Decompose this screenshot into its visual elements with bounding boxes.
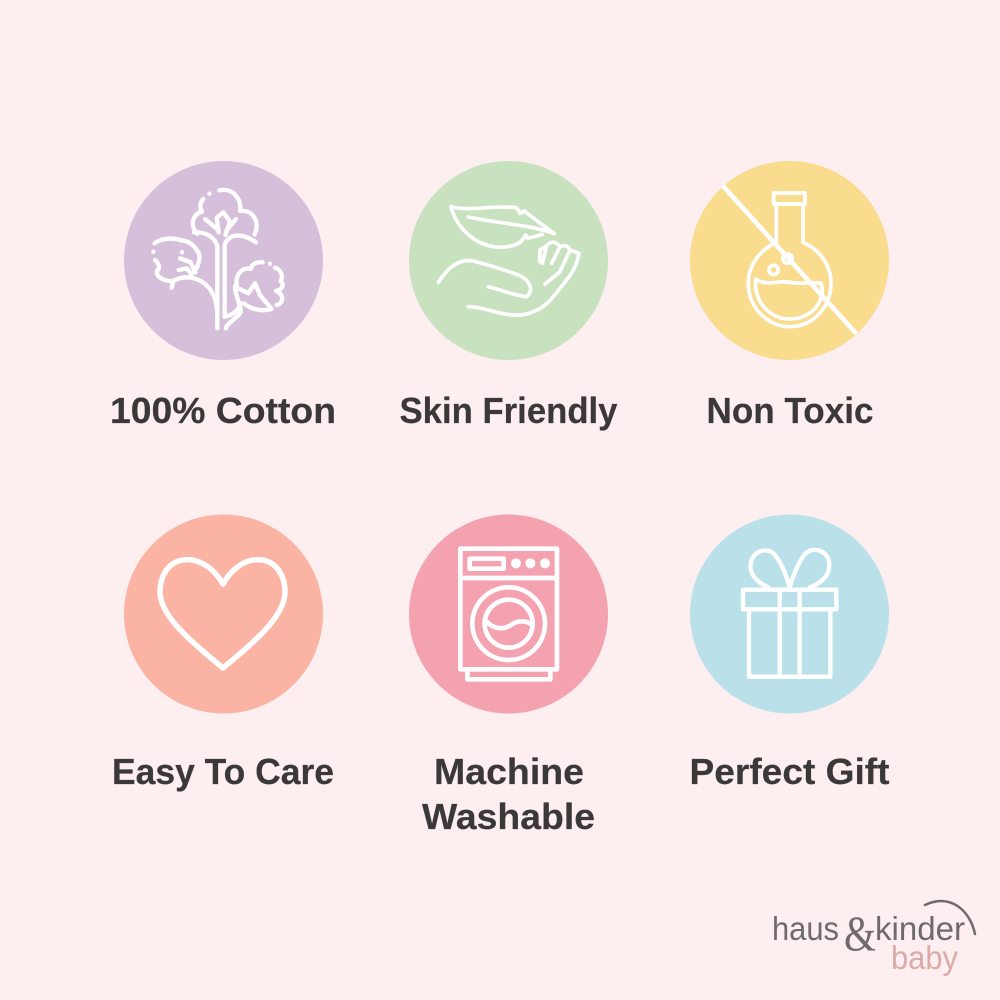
logo arc bbox=[925, 901, 975, 934]
logo wordmark: kinder: kinder bbox=[875, 910, 965, 947]
label: Machine Washable bbox=[422, 751, 595, 837]
circle: coral badge bbox=[124, 514, 323, 714]
label: Perfect Gift: Perfect Gift bbox=[690, 751, 890, 792]
label: Skin Friendly: Skin Friendly bbox=[400, 390, 618, 431]
icon: crossed-out flask bbox=[723, 186, 856, 334]
icon: leaf over hand bbox=[438, 207, 579, 315]
logo wordmark: baby: baby bbox=[891, 939, 958, 976]
panel: Perfect Gift bbox=[690, 514, 890, 792]
label: Non Toxic: Non Toxic bbox=[706, 390, 874, 431]
panel: 100% Cotton bbox=[110, 161, 336, 431]
panel: Skin Friendly bbox=[400, 161, 618, 431]
logo ampersand: & bbox=[844, 905, 876, 961]
icon: washing machine bbox=[460, 549, 557, 679]
circle: green badge bbox=[409, 161, 608, 360]
label: Machine Washable: Washable bbox=[422, 796, 595, 837]
logo wordmark: haus: haus bbox=[772, 910, 839, 947]
circle: purple badge bbox=[124, 161, 323, 360]
icon: cotton plant bbox=[153, 190, 283, 328]
icon: heart bbox=[160, 560, 285, 668]
panel: Machine Washable bbox=[409, 514, 608, 837]
circle: pink badge bbox=[409, 514, 608, 714]
circle: yellow badge bbox=[690, 161, 889, 360]
panel: Non Toxic bbox=[690, 161, 889, 431]
icon: gift box bbox=[743, 550, 836, 677]
label: 100% Cotton: 100% Cotton bbox=[110, 390, 336, 431]
circle: blue badge bbox=[690, 514, 889, 714]
panel: Easy To Care bbox=[112, 514, 334, 792]
label: Easy To Care: Easy To Care bbox=[112, 751, 334, 792]
label: Machine Washable: Machine bbox=[434, 751, 584, 792]
logo: haus & kinder baby bbox=[772, 901, 975, 976]
